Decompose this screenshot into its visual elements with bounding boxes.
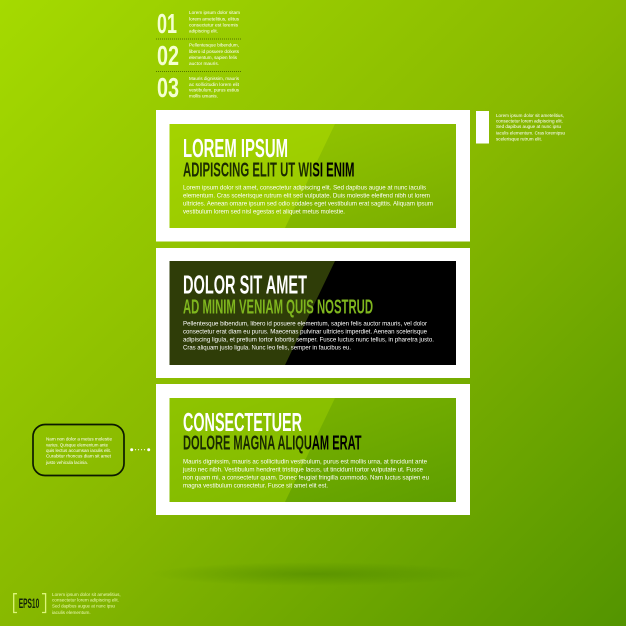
eps note text: consectetur lorem adipiscing elit.: [52, 598, 119, 604]
eps note text: Sed dapibus augue at nunc ipsu: [52, 603, 115, 609]
callout: [33, 424, 124, 476]
body text: justo nec nibh. Vestibulum hendrerit tristique lacus, ut tincidunt tortor vulputate ut. Fusce: [182, 466, 423, 474]
item 03: ac sollicitudin lorem elit: [189, 82, 240, 88]
subheading: DOLORE MAGNA ALIQUAM ERAT: [183, 432, 362, 454]
panel: dolor sit amet: [156, 248, 470, 378]
item 01: 01: [157, 8, 177, 39]
side note text: [496, 113, 565, 142]
callout text: [45, 437, 112, 466]
item 02: auctor mauris.: [189, 61, 219, 67]
heading: DOLOR SIT AMET: [183, 270, 307, 300]
item 02: libero id posuere dolxets: [189, 49, 240, 55]
body text: Cras aliquam justo ligula. Nunc leo felis, semper in faucibus eu.: [183, 344, 351, 352]
side note text: Lorem ipsum dolor sit ametelitius,: [496, 113, 564, 119]
item 01: lorem ametelitius, elitus: [189, 16, 240, 22]
item 02: [157, 40, 240, 71]
item 01: consectetur est loremis: [189, 23, 239, 29]
side note: [476, 111, 565, 144]
heading: LOREM IPSUM: [183, 133, 288, 163]
eps note text: iaculis elementum.: [52, 610, 91, 616]
body text: Pellentesque bibendum, libero id posuere elementum, sapien felis auctor mauris, vel dolor: [183, 320, 428, 328]
numbered list: [156, 8, 242, 103]
subheading: AD MINIM VENIAM QUIS NOSTRUD: [183, 296, 373, 318]
body text: elementum. Cras scelerisque rutrum elit sed vulputate. Duis molestie eleifend nibh ut lorem: [183, 192, 430, 200]
body text: vestibulum lorem sed nisl egestas et aliquet metus molestie.: [183, 208, 345, 216]
item 02: elementum, sapien felis: [189, 55, 238, 61]
item 03: vestibulum, purus estius: [189, 88, 240, 94]
item 01: Lorem ipsum dolor sitam: [189, 10, 240, 16]
item 03: mollis umanis.: [189, 93, 218, 99]
panel: lorem ipsum: [156, 110, 470, 242]
body text: [182, 458, 429, 490]
eps note text: [52, 592, 121, 616]
floor shadow: [150, 562, 480, 586]
subheading: ADIPISCING ELIT UT WISI ENIM: [183, 160, 354, 182]
body text: [183, 184, 433, 216]
callout text: quis lectus accumsan iaculis elit.: [46, 448, 111, 454]
item 03: Mauris dignissim, mauris: [189, 76, 240, 82]
panel: consectetuer: [156, 384, 470, 515]
item 02: 02: [157, 40, 179, 71]
white bar: [476, 111, 489, 144]
item 03: [157, 72, 240, 103]
body text: Lorem ipsum dolor sit amet, consectetur adipiscing elit. Sed dapibus augue at nunc iaculis: [183, 184, 427, 192]
body text: adipiscing ligula, et pretium tortor lobortis semper. Fusce luctus nunc tellus, in pharetra justo.: [183, 336, 434, 344]
callout text: Curabitur rhoncus diam sit amet: [46, 454, 112, 460]
item 01: [157, 8, 240, 39]
brackets: [14, 594, 46, 612]
body text: [183, 320, 434, 352]
body text: consectetur erat diam eu purus. Maecenas pulvinar ultricies imperdiet. Aenean scelerisque: [183, 328, 427, 336]
item 03: 03: [157, 72, 179, 103]
heading: CONSECTETUER: [183, 407, 302, 437]
body text: Mauris dignissim, mauris ac sollicitudin vestibulum, purus est mollis urna, at tincidunt ante: [183, 458, 427, 466]
side note text: Sed dapibus augue at nunc ipsu: [496, 124, 561, 130]
item 01: adipiscing elit.: [189, 28, 218, 34]
side note text: scelerisque rutrum elit.: [496, 136, 542, 142]
arrow: dotted connector: [130, 448, 150, 451]
side note text: iaculis elementum. Cras loremipsu: [496, 130, 565, 136]
eps note text: Lorem ipsum dolor sit ametelitius,: [52, 592, 121, 598]
item 02: Pellentesque bibendum,: [189, 43, 239, 49]
callout text: varius. Quisque elementum ante: [46, 443, 108, 449]
callout text: Nam non dolor a metus molestie: [46, 437, 112, 443]
body text: magna vestibulum consectetur. Fusce sit amet elit est.: [183, 482, 328, 490]
body text: ultricies. Aenean ornare ipsum sed odio sodales eget vestibulum erat sagittis. Aliquam ipsum: [183, 200, 433, 208]
body text: non quam mi, a consectetur quam. Donec feugiat fringilla commodo. Nam luctus sapien eu: [183, 474, 429, 482]
eps badge: EPS10: [19, 596, 39, 611]
eps badge: [14, 592, 121, 616]
side note text: consectetur lorem adipiscing elit.: [496, 119, 563, 125]
callout text: justo vehicula lacinia.: [45, 460, 88, 466]
